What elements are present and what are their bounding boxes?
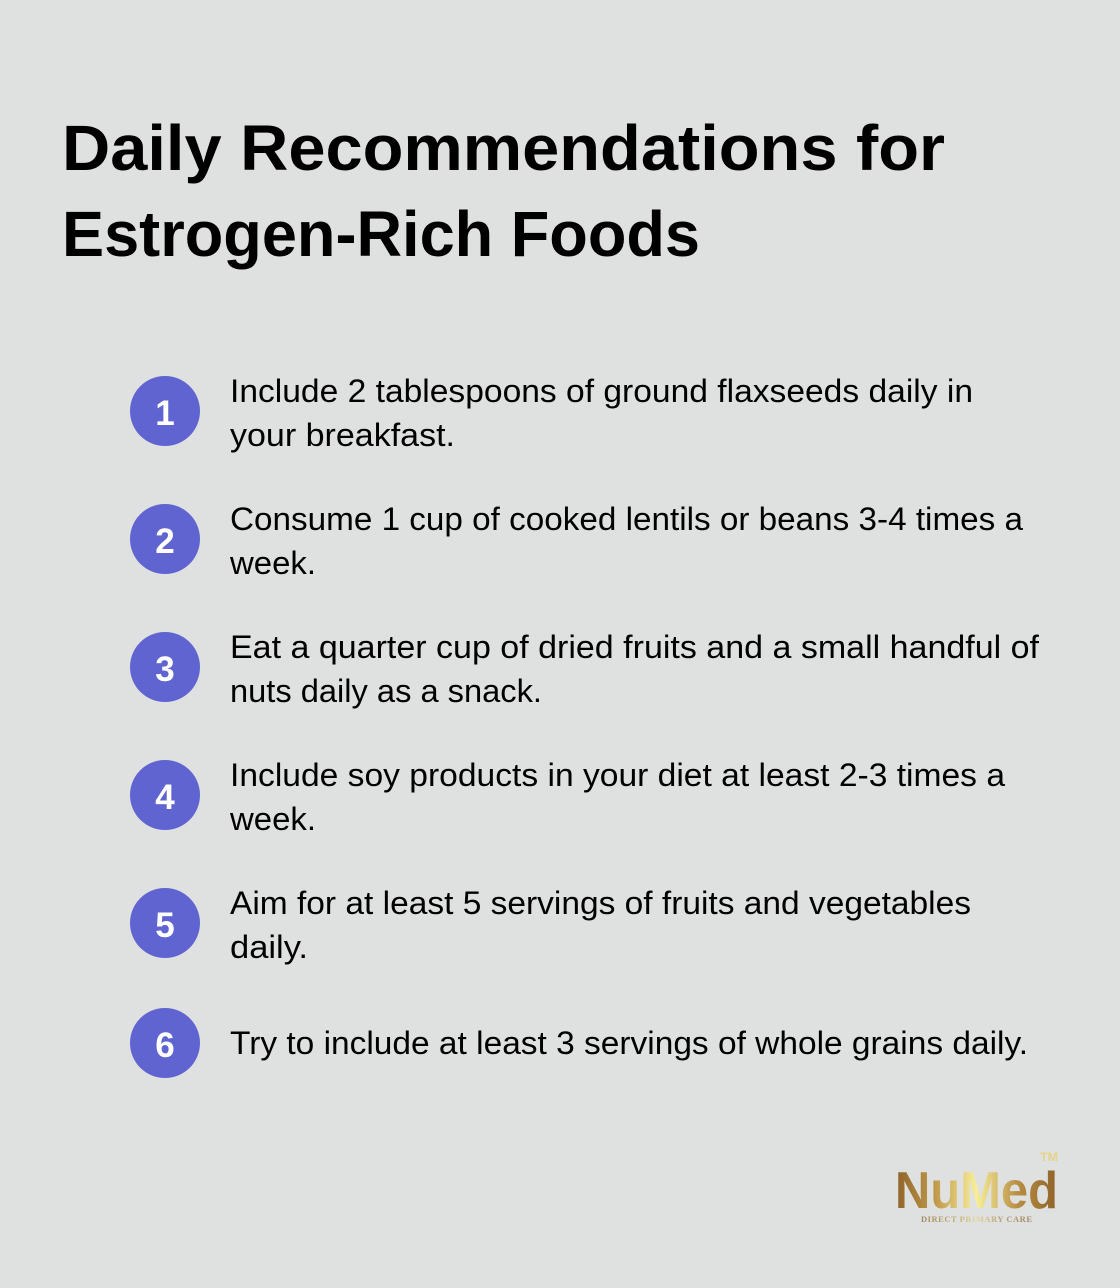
item 4 text: [229, 757, 1005, 837]
logo: NuMed: TM: [1040, 1152, 1058, 1164]
number badge 5: [130, 888, 200, 958]
item 4 text: Include soy products in your diet at least 2-3 times a: [230, 757, 1005, 793]
number badge 4: 4: [155, 778, 175, 817]
item 1 text: your breakfast.: [230, 417, 455, 453]
list item 2: [130, 501, 1023, 581]
list item 4: [130, 757, 1005, 837]
list item 5: [130, 885, 971, 965]
list item 1: [130, 373, 973, 453]
logo: NuMed: NuMed: [895, 1162, 1058, 1220]
number badge 1: [130, 376, 200, 446]
item 3 text: nuts daily as a snack.: [230, 673, 542, 709]
number badge 2: 2: [155, 522, 175, 561]
logo: NuMed: DIRECT PRIMARY CARE: [921, 1214, 1032, 1224]
number badge 3: [130, 632, 200, 702]
item 3 text: Eat a quarter cup of dried fruits and a small handful of: [230, 629, 1039, 665]
item 2 text: week.: [229, 545, 316, 581]
title: Daily Recommendations for: [62, 112, 945, 184]
item 5 text: [230, 885, 971, 965]
item 2 text: Consume 1 cup of cooked lentils or beans 3-4 times a: [230, 501, 1023, 537]
item 4 text: week.: [229, 801, 316, 837]
item 1 text: Include 2 tablespoons of ground flaxseeds daily in: [230, 373, 973, 409]
number badge 1: 1: [155, 394, 175, 433]
list item 6: [130, 1008, 1028, 1078]
number badge 6: [130, 1008, 200, 1078]
title: Estrogen-Rich Foods: [62, 198, 700, 270]
title: [62, 112, 945, 270]
item 1 text: [230, 373, 973, 453]
number badge 6: 6: [155, 1026, 175, 1065]
number badge 4: [130, 760, 200, 830]
number badge 2: [130, 504, 200, 574]
number badge 5: 5: [155, 906, 175, 945]
list item 3: [130, 629, 1039, 709]
item 5 text: Aim for at least 5 servings of fruits and vegetables: [230, 885, 971, 921]
item 2 text: [229, 501, 1023, 581]
item 5 text: daily.: [230, 929, 308, 965]
number badge 3: 3: [155, 650, 175, 689]
item 6 text: Try to include at least 3 servings of whole grains daily.: [230, 1025, 1028, 1061]
item 3 text: [230, 629, 1039, 709]
